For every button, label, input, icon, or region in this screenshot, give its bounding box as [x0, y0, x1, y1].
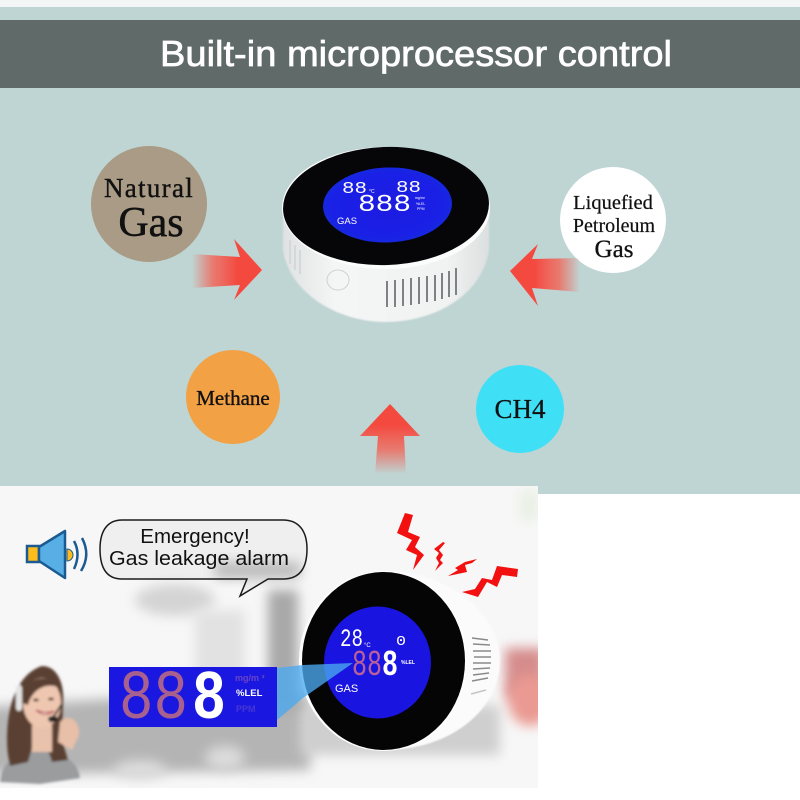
circle: CH4: [476, 365, 564, 453]
lcd readings: %LEL: [401, 660, 415, 666]
lcd readings: [336, 629, 415, 692]
speech bubble: Gas leakage alarm: [109, 547, 289, 570]
detector vents: [290, 240, 456, 307]
lcd readings: [337, 179, 426, 227]
circle: CH4: CH4: [494, 394, 546, 424]
title banner: [0, 20, 800, 88]
lcd readings: PPM: [417, 207, 425, 211]
detector rim: [282, 147, 490, 269]
second detector: [299, 571, 500, 751]
circle: Natural Gas: [91, 146, 207, 262]
lcd readings: 8: [382, 645, 398, 686]
lcd readings: GAS: [337, 216, 357, 227]
circle: Methane: Methane: [196, 386, 270, 410]
white rim: [299, 620, 402, 751]
black face: [302, 572, 465, 750]
lcd readings: mg/m³: [415, 196, 426, 200]
woman with headset: [0, 666, 80, 784]
circle: Liquefied Petroleum Gas: [560, 167, 666, 273]
lcd readings: 28: [340, 625, 363, 654]
arrow: left-pointing: [510, 244, 580, 306]
lcd readings: 888: [358, 192, 411, 219]
enlarged lcd readout: 8: [192, 661, 226, 740]
red alarm lightning bolts: [397, 513, 518, 597]
circle: Liquefied Petroleum Gas: Liquefied: [573, 192, 653, 214]
enlarged lcd readout: [109, 667, 277, 727]
lcd screen: [324, 606, 431, 718]
enlarged lcd readout: 88: [119, 661, 188, 740]
arrow: right-pointing: [192, 239, 262, 300]
circle: Natural Gas: Gas: [118, 200, 184, 246]
side vents: [471, 638, 491, 694]
detector body: [396, 647, 500, 750]
gas detector product: [281, 143, 491, 322]
top light stripe: [0, 0, 800, 7]
lcd readings: 88: [352, 645, 382, 686]
detector lcd screen: [322, 165, 453, 245]
detector black face: [281, 143, 491, 269]
detector button: [327, 270, 349, 290]
arrow: up-pointing: [360, 404, 420, 474]
circle: Liquefied Petroleum Gas: Petroleum: [573, 215, 656, 237]
circle: Methane: [186, 350, 280, 444]
lcd readings: GAS: [335, 683, 358, 695]
detector body: [283, 205, 489, 322]
lcd readings: °C: [364, 643, 371, 649]
lcd readings: %LEL: [416, 202, 425, 206]
page background panel: [0, 0, 800, 494]
enlarged lcd readout: PPM: [236, 704, 256, 714]
speaker icon: [27, 531, 86, 578]
circle: Natural Gas: Natural: [104, 173, 194, 203]
bottom photo panel: [0, 486, 552, 788]
speech bubble: [100, 520, 307, 596]
enlarged lcd readout: mg/m ³: [235, 673, 265, 683]
lcd readings: 88: [396, 179, 421, 198]
callout beam: [277, 663, 353, 720]
lcd readings: 0: [396, 634, 406, 650]
circle: Liquefied Petroleum Gas: Gas: [595, 236, 633, 263]
blurred kitchen background: [0, 486, 552, 788]
title banner: Built-in microprocessor control: [160, 33, 672, 74]
lcd readings: °C: [369, 189, 375, 195]
speech bubble: Emergency!: [140, 525, 250, 548]
lcd readings: 88: [342, 180, 367, 199]
enlarged lcd readout: %LEL: [236, 688, 263, 699]
